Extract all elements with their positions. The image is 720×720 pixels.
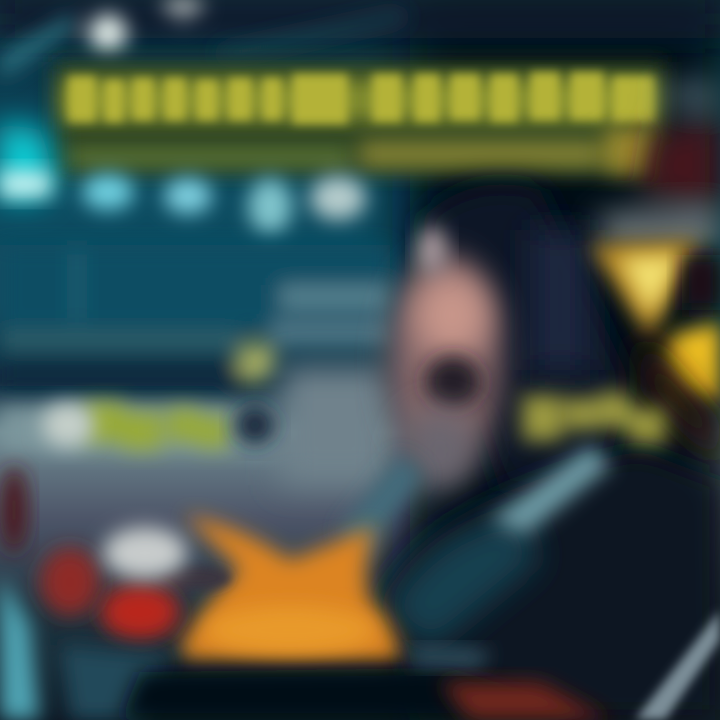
lower left teal shape bbox=[0, 575, 170, 720]
yellow glow at right bbox=[590, 240, 720, 470]
title block bbox=[55, 62, 665, 174]
right label bbox=[522, 392, 666, 448]
row of glowing tiles bbox=[82, 174, 366, 234]
upper right dark red panel bbox=[600, 85, 720, 245]
red and white objects bbox=[0, 466, 187, 640]
bottom dashboard bbox=[120, 610, 720, 720]
jacket bbox=[340, 445, 720, 720]
ceiling lights bbox=[0, 0, 410, 80]
person bbox=[389, 184, 630, 500]
lower left label strip bbox=[0, 365, 390, 485]
face bbox=[389, 255, 501, 465]
subtitle block bbox=[70, 128, 655, 174]
orange object bbox=[159, 515, 400, 662]
cyan glow on the left bbox=[0, 122, 54, 198]
middle chart area bbox=[0, 245, 390, 386]
